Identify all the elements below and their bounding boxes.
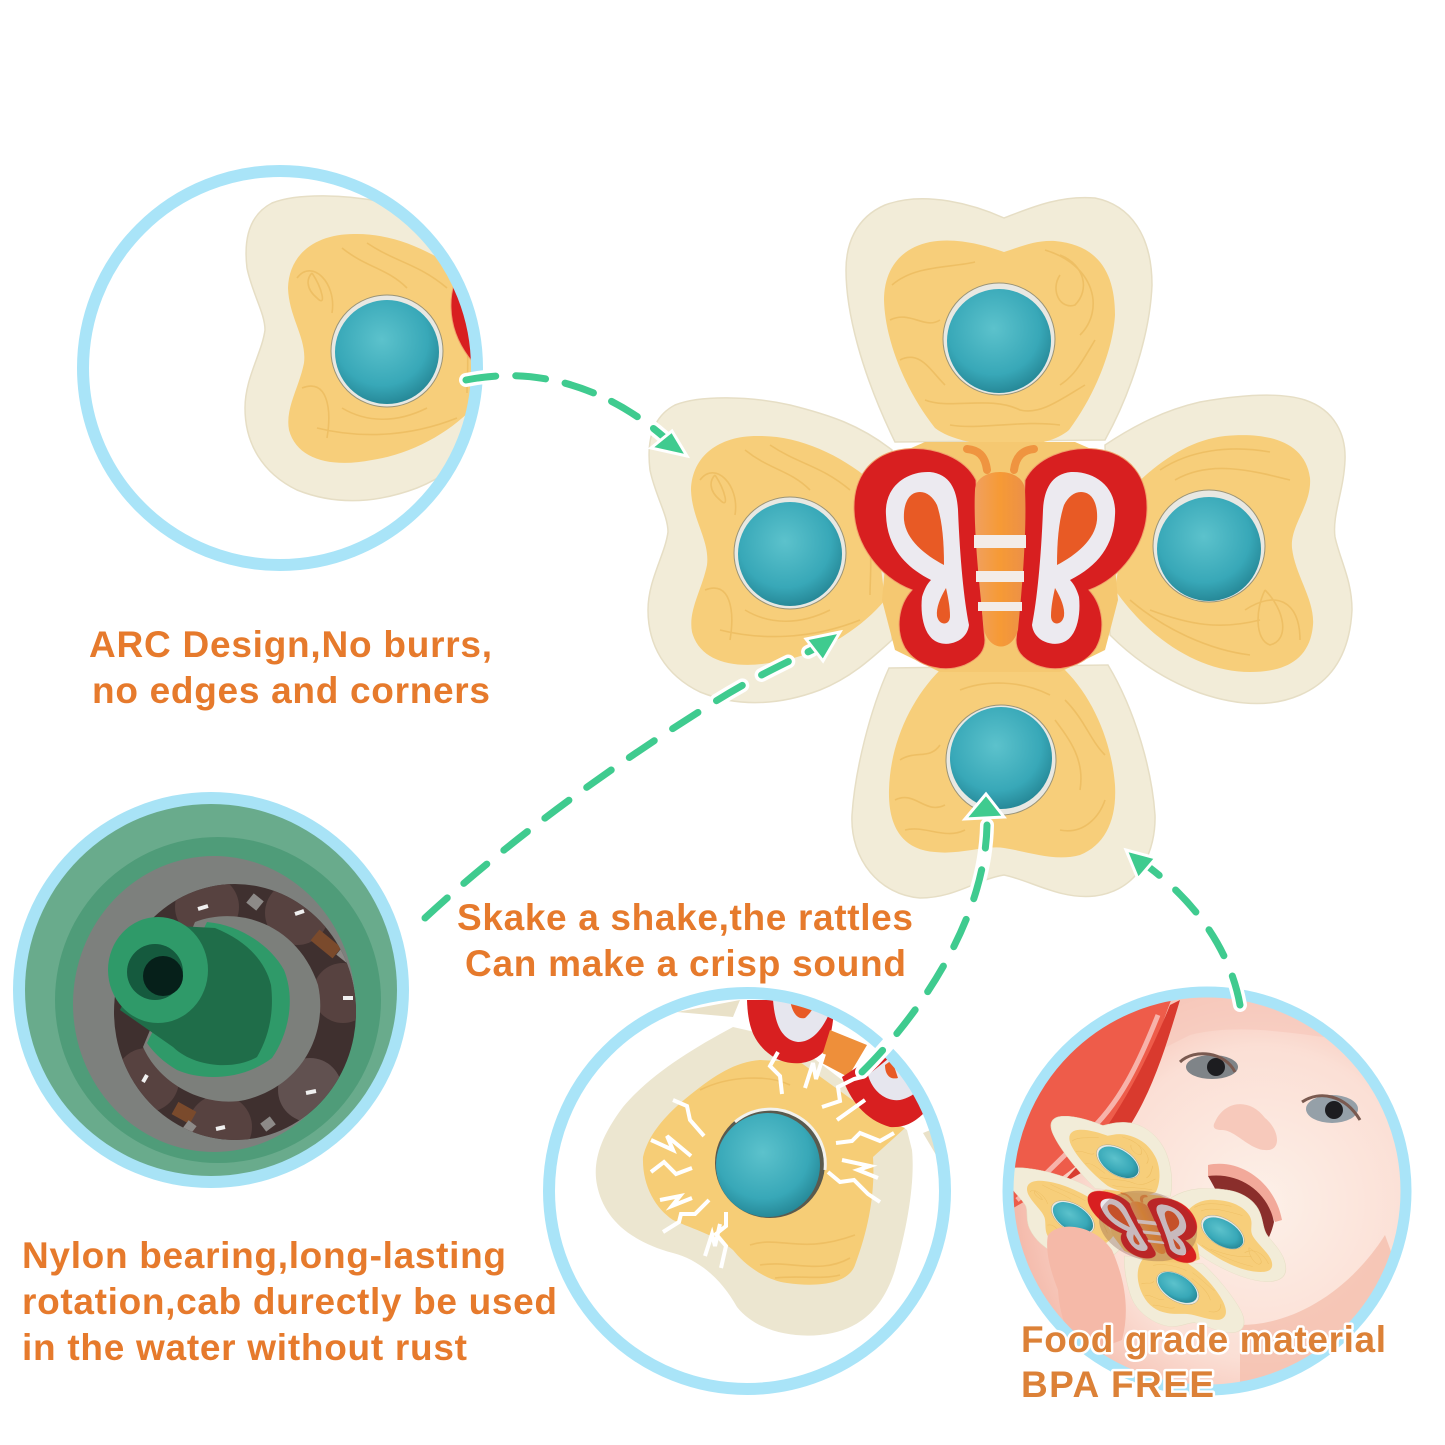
petal: left — [648, 398, 892, 703]
wood grain — [700, 1078, 855, 1278]
baby hand — [1047, 1227, 1126, 1352]
butterfly left wing — [854, 449, 985, 669]
callout circle: rattle sound — [549, 993, 955, 1389]
arrow: arc design to left petal — [466, 376, 687, 456]
butterfly body — [975, 472, 1025, 646]
butterfly right wing — [1016, 449, 1147, 669]
text: nylon bearing: Nylon bearing,long-lasting — [22, 1235, 506, 1276]
forehead shade — [1166, 1020, 1324, 1046]
ball arc highlight — [735, 1109, 825, 1170]
towel shadow fold — [1060, 1000, 1180, 1185]
teal ball — [716, 1113, 820, 1217]
inner green housing — [55, 837, 381, 1163]
text: rattles: Can make a crisp sound — [465, 943, 906, 984]
cone base rim — [147, 922, 290, 1077]
arrow: food grade circle to toy — [1126, 850, 1240, 1005]
cropped baby scene — [1014, 998, 1400, 1384]
text: nylon bearing: in the water without rust — [22, 1327, 467, 1368]
cone body — [120, 925, 272, 1065]
text: nylon bearing: rotation,cab durectly be used — [22, 1281, 557, 1322]
callout circle: baby with toy — [1002, 986, 1412, 1396]
petal: right — [1105, 395, 1352, 703]
petal: top — [846, 198, 1152, 446]
upper lip — [1208, 1164, 1282, 1222]
callout circle: arc design — [83, 0, 949, 696]
main toy: butterfly suction spinner — [648, 198, 1352, 898]
grey seal — [73, 856, 355, 1152]
teal ball: top — [943, 283, 1055, 395]
cropped view of toy petal — [245, 0, 949, 696]
circle ring — [1008, 992, 1406, 1390]
petal: bottom — [852, 665, 1155, 898]
nozzle hole depth — [143, 956, 183, 996]
mini toy — [972, 1105, 1323, 1343]
nose — [1214, 1104, 1277, 1150]
left eye — [1180, 1054, 1238, 1079]
text: rattles: Skake a shake,the rattles — [457, 897, 913, 938]
mouth — [1208, 1176, 1274, 1238]
circle ring — [549, 993, 945, 1389]
yellow area — [643, 1060, 905, 1285]
red towel — [1014, 1001, 1171, 1208]
circle ring — [83, 171, 477, 565]
side petal slivers — [678, 1000, 936, 1154]
body stripes — [974, 535, 1026, 611]
text: food grade: BPA FREE — [1021, 1364, 1214, 1405]
blue disc — [13, 792, 409, 1188]
nozzle top — [108, 917, 208, 1023]
lower red wing — [842, 1055, 925, 1127]
upper red wing — [747, 1000, 834, 1063]
lower face shading — [1240, 1235, 1391, 1382]
teal ball: left — [734, 497, 846, 609]
arrow: rattle circle to toy — [862, 794, 1004, 1072]
grey collar — [143, 916, 320, 1102]
callout circle: nylon bearing — [13, 792, 409, 1188]
outer green housing — [25, 804, 397, 1176]
right eye — [1302, 1095, 1360, 1123]
lower white marking — [868, 1060, 913, 1100]
cropped scene — [596, 1000, 955, 1336]
text: food grade: Food grade material — [1021, 1319, 1386, 1360]
butterfly antennae — [967, 449, 1034, 470]
cream petal — [596, 1027, 913, 1336]
steel balls — [114, 884, 356, 1140]
ball ring — [715, 1108, 825, 1218]
towel edge — [1017, 1015, 1158, 1200]
text: arc design: no edges and corners — [92, 670, 490, 711]
nozzle hole — [127, 944, 183, 1000]
upper white marking — [773, 1000, 830, 1042]
skin background — [1014, 998, 1400, 1384]
vibration marks — [651, 1052, 894, 1268]
arrow: rattle label to toy — [425, 632, 840, 918]
teal ball: bottom — [946, 705, 1056, 815]
butterfly — [854, 449, 1147, 669]
orange body — [820, 1030, 867, 1077]
upper orange spot — [790, 1004, 812, 1018]
hub — [882, 442, 1118, 672]
mini butterfly tint — [1099, 1190, 1197, 1262]
lower orange spot — [885, 1062, 898, 1078]
teal ball: right — [1153, 490, 1265, 602]
text: arc design: ARC Design,No burrs, — [89, 624, 492, 665]
